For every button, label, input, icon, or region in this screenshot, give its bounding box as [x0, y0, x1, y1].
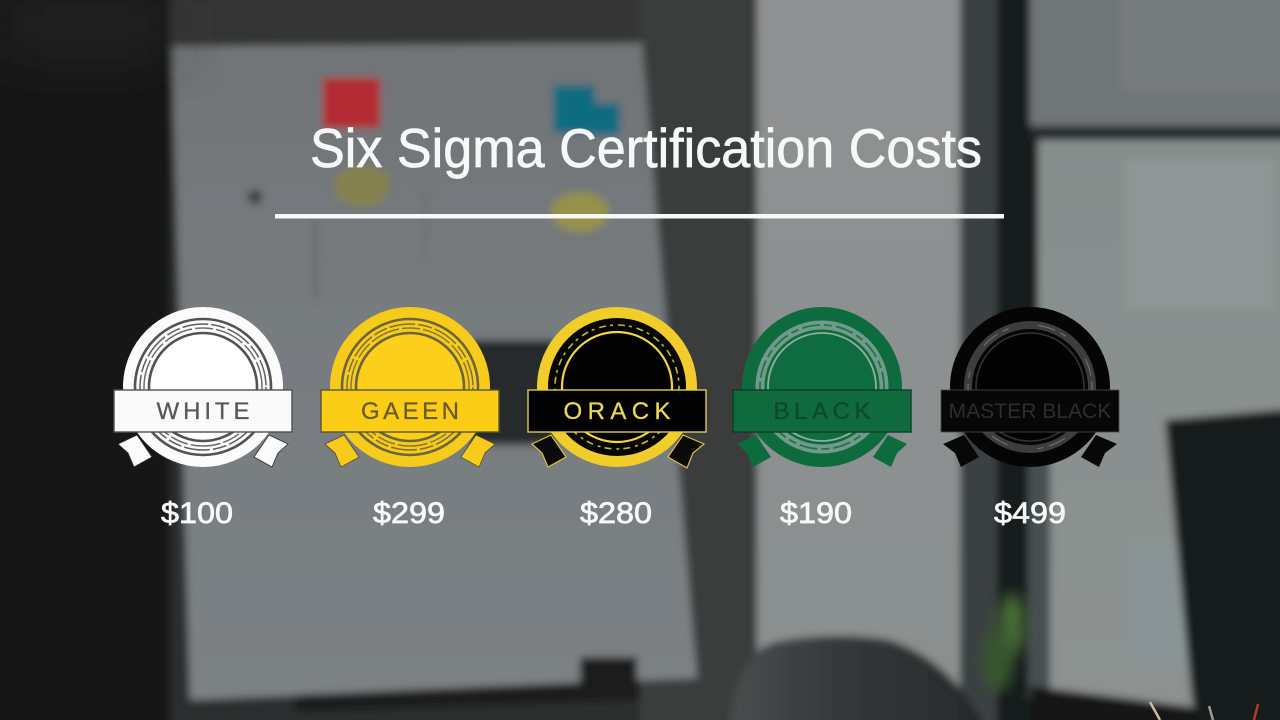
top-left wall glow [0, 0, 170, 50]
banner label: master black: MASTER BLACK [948, 400, 1112, 423]
price: dark green: $190 [780, 497, 852, 530]
title underline [275, 214, 1004, 218]
price: green: $299 [373, 497, 445, 530]
badge: master black [941, 307, 1119, 467]
banner label: black: ORACK [564, 398, 670, 425]
badge: dark green [733, 307, 911, 467]
banner label: white: WHITE [156, 398, 250, 425]
badge: white [114, 307, 292, 467]
banner label: dark green: BLACK [774, 398, 870, 425]
plant [982, 593, 1026, 692]
price: white: $100 [161, 497, 233, 530]
badge: black [528, 307, 706, 468]
title: Six Sigma Certification Costs [310, 117, 982, 179]
price: master black: $499 [994, 497, 1066, 530]
pencils [1150, 702, 1258, 720]
banner label: green: GAEEN [361, 398, 459, 425]
price: black: $280 [580, 497, 652, 530]
badge: green [321, 307, 499, 467]
